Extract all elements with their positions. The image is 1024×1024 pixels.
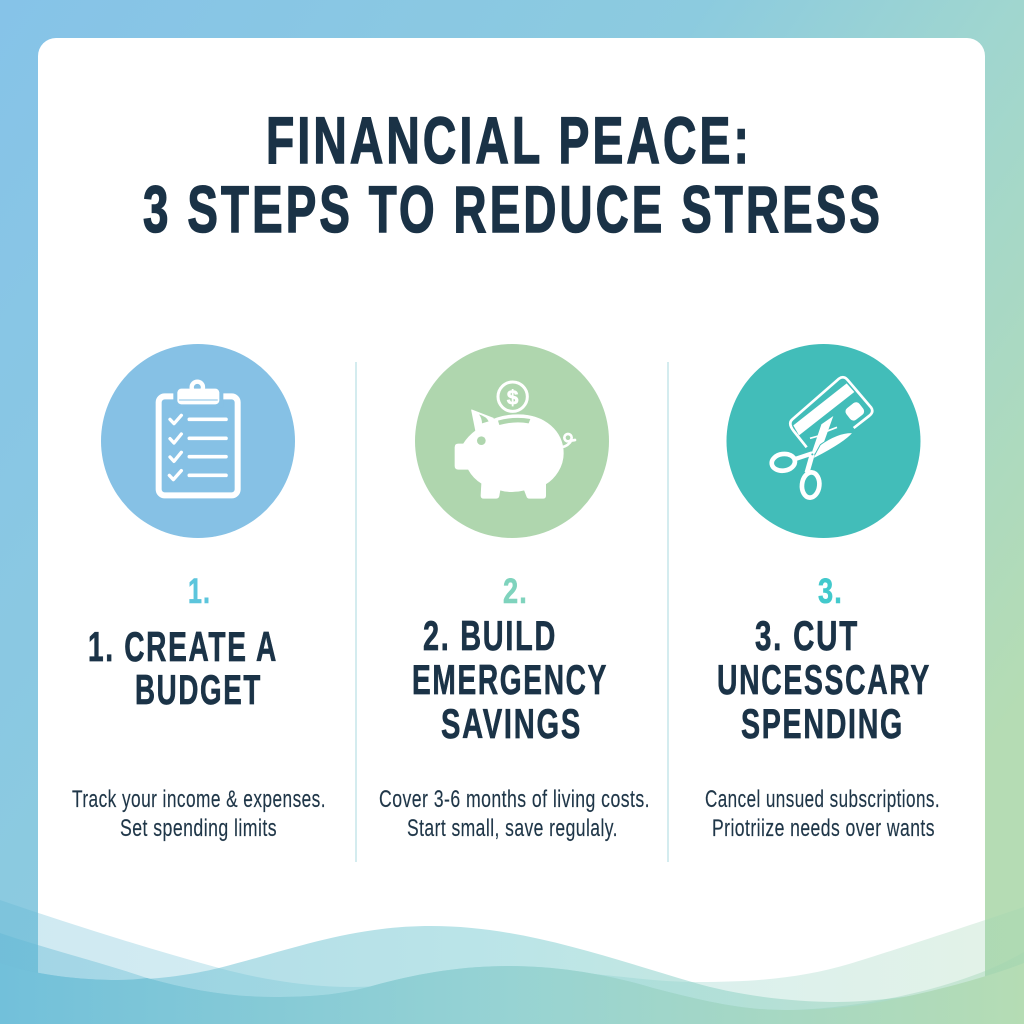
- icon: clipboard checklist: [101, 344, 295, 538]
- description: budget: [72, 786, 326, 842]
- heading: build emergency savings: 2. BUILD: [423, 612, 557, 659]
- heading: cut unnecessary spending: SPENDING: [741, 700, 904, 747]
- panel: step 1 create a budget: [72, 344, 326, 842]
- heading: build emergency savings: SAVINGS: [441, 700, 582, 747]
- heading: cut unnecessary spending: 3. CUT: [755, 612, 859, 659]
- panel: step 2 build emergency savings: [379, 344, 650, 842]
- panel: step 3 cut unnecessary spending: [705, 344, 940, 842]
- heading: create a budget: 1. CREATE A: [88, 623, 278, 670]
- step number 1: 1.: [188, 572, 211, 611]
- description: budget: Set spending limits: [120, 815, 277, 842]
- description: savings: [379, 786, 650, 842]
- step number 3: 3.: [818, 572, 843, 611]
- description: savings: Cover 3-6 months of living costs.: [379, 786, 650, 813]
- description: spending: Priotriize needs over wants: [712, 815, 935, 842]
- description: budget: Track your income & expenses.: [72, 786, 326, 813]
- title: FINANCIAL PEACE:: [266, 103, 752, 177]
- description: savings: Start small, save regulaly.: [407, 815, 618, 842]
- heading: create a budget: [88, 623, 278, 713]
- heading: build emergency savings: EMERGENCY: [412, 656, 608, 703]
- wave footer: [0, 900, 1024, 1024]
- description: spending: [705, 786, 940, 842]
- step number 2: 2.: [503, 572, 528, 611]
- heading: cut unnecessary spending: [717, 612, 931, 747]
- icon: scissors cutting credit card: [726, 344, 920, 538]
- heading: build emergency savings: [412, 612, 608, 747]
- icon: piggy bank with coin: [415, 344, 609, 538]
- title: [143, 103, 883, 246]
- heading: create a budget: BUDGET: [135, 666, 262, 713]
- icon: piggy bank with coin: $: [507, 386, 519, 409]
